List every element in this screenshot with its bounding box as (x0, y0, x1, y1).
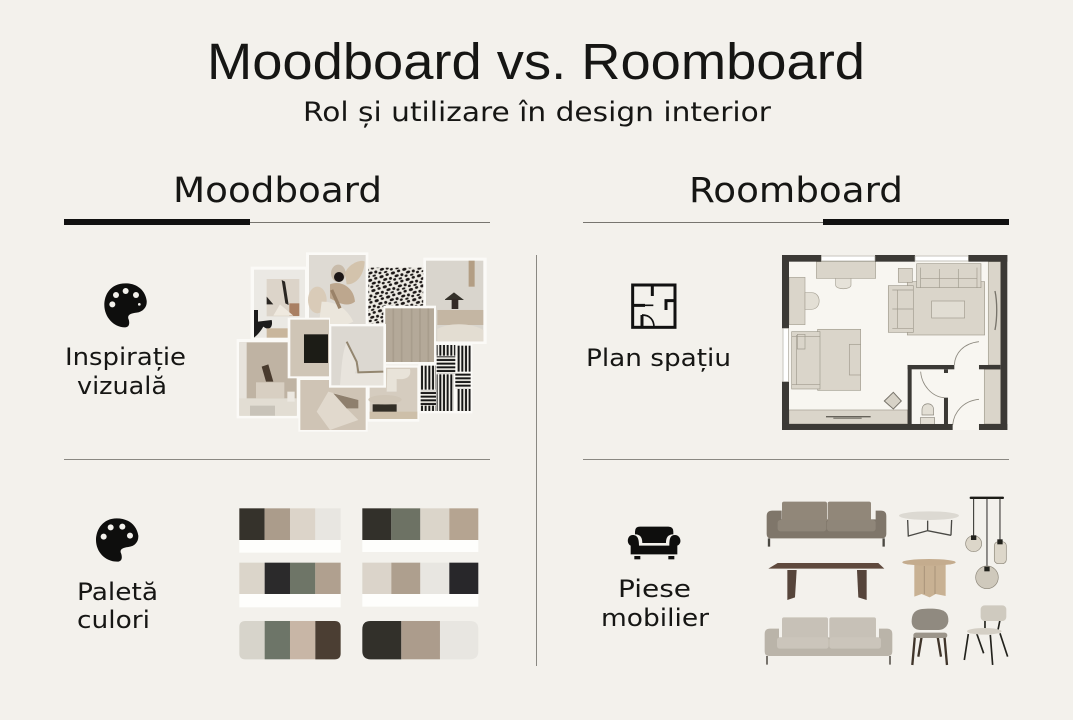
image collage (237, 252, 487, 432)
windows (783, 256, 968, 382)
table: oak pedestal (902, 559, 956, 597)
furniture: living room set (888, 264, 985, 335)
block: Paletă culori label and icon: culori (77, 606, 150, 634)
furniture: desk and chair top (816, 262, 876, 289)
panel heading: Roomboard: Roomboard (689, 171, 903, 211)
icon: floor plan (633, 285, 675, 327)
table: round coffee (899, 511, 959, 537)
sofa: taupe (767, 502, 886, 547)
furniture: toilet (920, 404, 935, 424)
chair: walnut armchair (912, 609, 948, 665)
photo: folded fabric (329, 324, 386, 388)
title: Moodboard vs. Roomboard (207, 33, 865, 90)
block: Inspirație vizuală label and icon: Inspirație (65, 343, 186, 371)
panel heading: Moodboard: Moodboard (173, 171, 382, 211)
swatch: dotted pattern (368, 268, 423, 323)
block: Inspirație vizuală label and icon (65, 283, 186, 400)
table: walnut dining (768, 563, 884, 600)
palette 2 (362, 508, 478, 552)
block: Plan spațiu label and icon: Plan spațiu (586, 344, 731, 372)
swatch: linen texture (383, 306, 436, 364)
block: Piese mobilier label and icon (601, 527, 709, 632)
swatch: woven stripes (418, 344, 472, 413)
palette 1 (239, 508, 341, 553)
icon: painter palette (104, 283, 147, 327)
photo: sculptural flowers (306, 252, 368, 330)
panel heading: Roomboard (583, 171, 1009, 225)
block: Plan spațiu label and icon (586, 285, 731, 372)
photo: black square on plaster (288, 318, 330, 378)
block: Piese mobilier label and icon: Piese (618, 575, 691, 603)
block: Piese mobilier label and icon: mobilier (601, 604, 709, 632)
photo: draped linen (298, 378, 368, 432)
palette 5 (239, 621, 341, 659)
furniture: side desk and chair (789, 277, 819, 325)
chair: light with black legs (964, 605, 1008, 665)
furniture collection (765, 497, 1008, 665)
icon: armchair (628, 527, 680, 559)
doors (921, 342, 979, 425)
block: Paletă culori label and icon: Paletă (77, 578, 158, 606)
palette 4 (362, 563, 478, 607)
photo: chair and table (368, 366, 419, 422)
colour palettes (239, 508, 478, 659)
furniture: wardrobe strip (984, 262, 1001, 424)
photo: lamp and sofa (423, 258, 487, 344)
subtitle: Rol și utilizare în design interior (303, 97, 772, 128)
block: Paletă culori label and icon (77, 518, 158, 634)
sofa: light grey (765, 617, 892, 665)
block: Inspirație vizuală label and icon: vizuală (77, 372, 167, 400)
icon: painter palette (96, 518, 138, 562)
walls (782, 255, 1007, 430)
palette 3 (239, 563, 341, 607)
panel heading: Moodboard (64, 171, 490, 225)
pendant lamps (966, 497, 1006, 589)
floor plan (782, 255, 1007, 430)
interior floor (782, 255, 1007, 430)
furniture: tv console and armchair (789, 392, 908, 424)
palette 6 (362, 621, 478, 659)
furniture: bed (792, 329, 861, 390)
photo: wall art room (251, 267, 307, 341)
photo: bathroom niche (237, 339, 299, 418)
